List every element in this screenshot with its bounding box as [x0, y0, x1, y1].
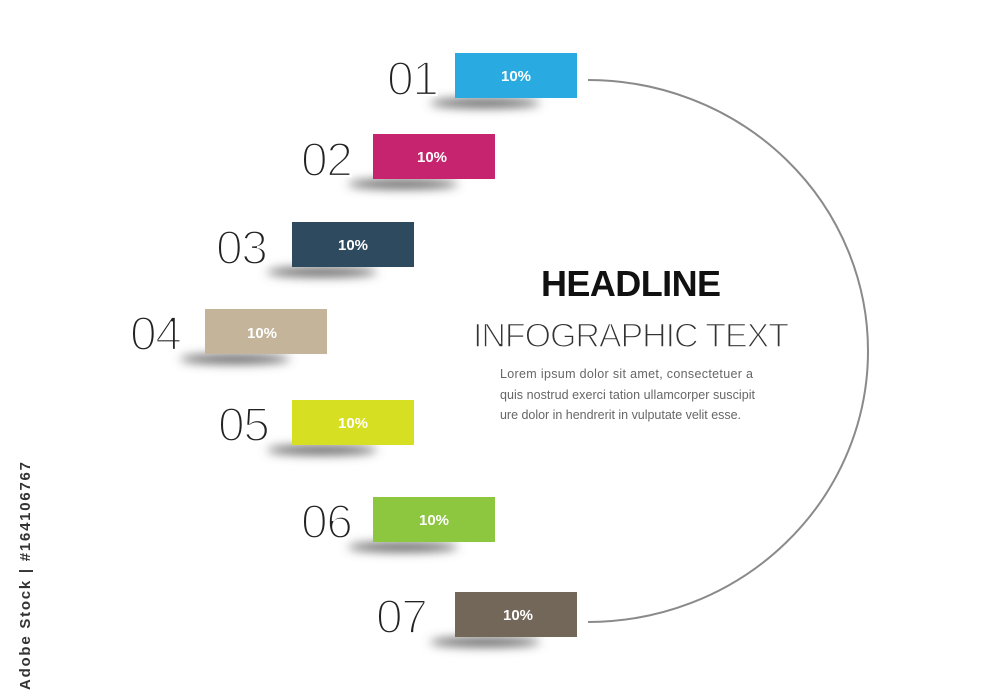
item 03: 03 [216, 222, 268, 275]
item 01 [387, 53, 577, 108]
item 04 [130, 308, 327, 364]
item 04: 10% [247, 325, 277, 342]
item 07 [376, 591, 577, 647]
item 06 [301, 496, 495, 552]
body text: Lorem ipsum dolor sit amet, consectetuer a [500, 367, 753, 381]
watermark label: Adobe Stock | #164106767 [17, 462, 34, 690]
headline: HEADLINE [541, 263, 721, 304]
item 07: 07 [376, 591, 428, 644]
item 01: 10% [501, 68, 531, 85]
arc [588, 80, 868, 622]
item 07: 10% [503, 607, 533, 624]
item 05: 05 [218, 399, 270, 452]
subheadline: INFOGRAPHIC TEXT [473, 317, 789, 355]
body text: quis nostrud exerci tation ullamcorper suscipit [500, 388, 756, 402]
item 05: 10% [338, 415, 368, 432]
body text [500, 367, 756, 422]
item 02: 02 [301, 134, 353, 187]
item 02: 10% [417, 149, 447, 166]
item 05 [218, 399, 414, 455]
item 01: 01 [387, 53, 439, 106]
body text: ure dolor in hendrerit in vulputate velit esse. [500, 408, 741, 422]
item 06: 06 [301, 496, 353, 549]
item 03 [216, 222, 414, 277]
item 06: 10% [419, 512, 449, 529]
item 03: 10% [338, 237, 368, 254]
item 02 [301, 134, 495, 189]
item 04: 04 [130, 308, 182, 361]
